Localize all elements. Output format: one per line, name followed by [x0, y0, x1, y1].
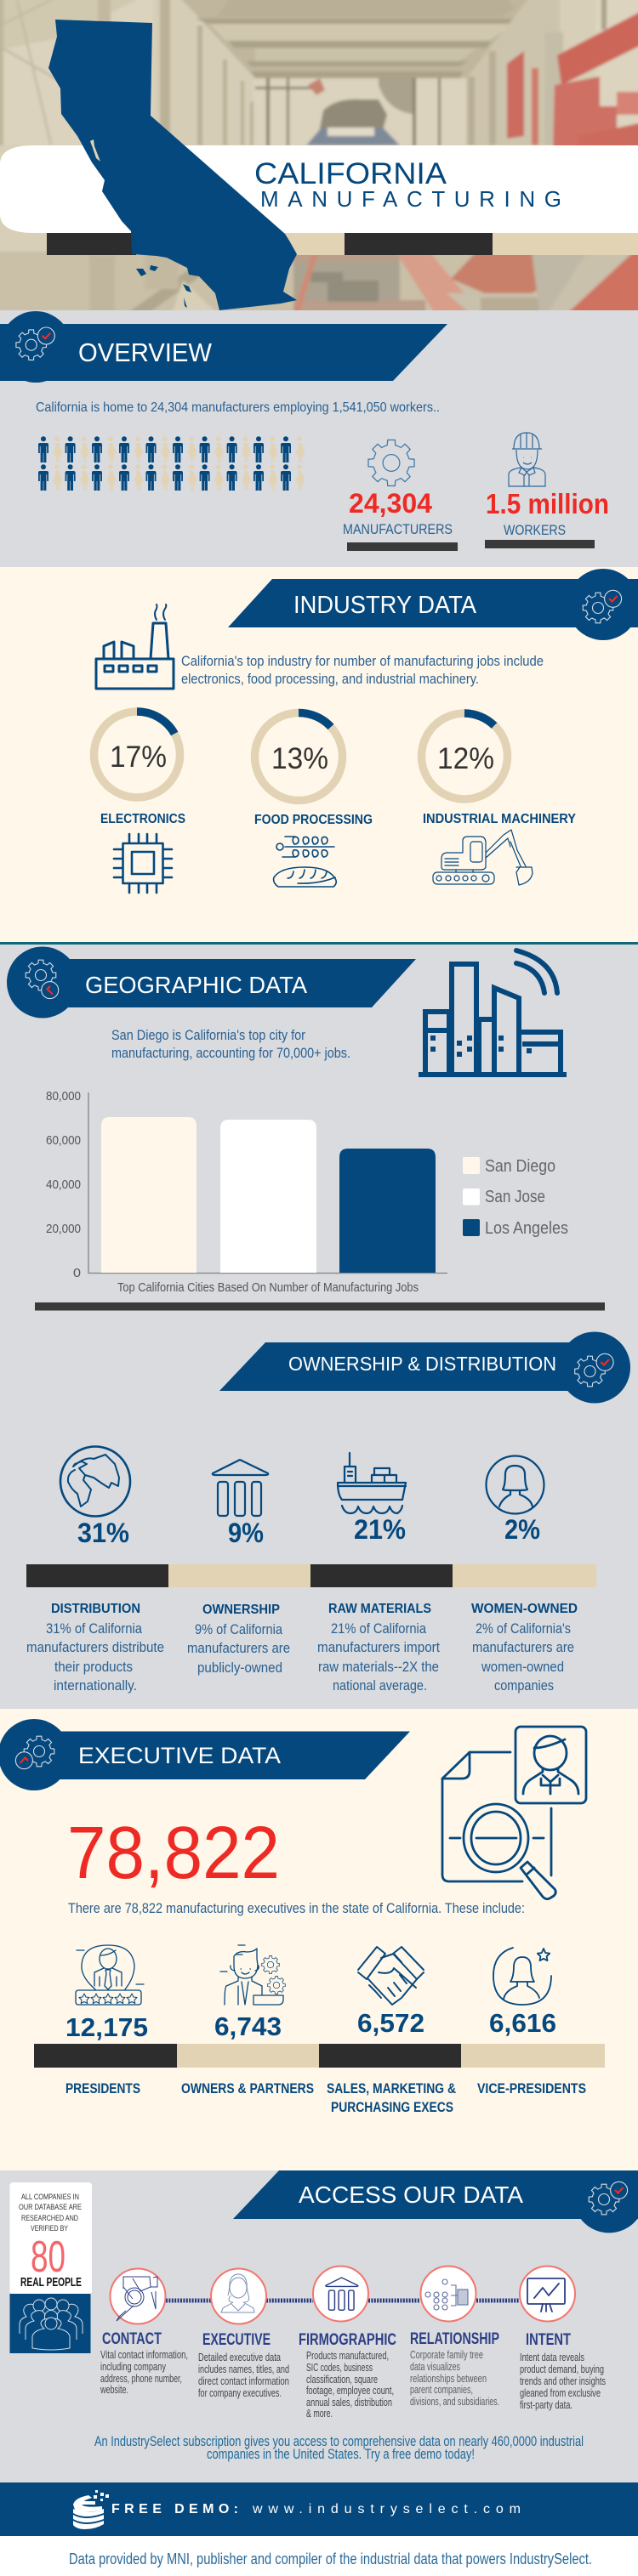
bar chart: top cities	[46, 1089, 568, 1295]
column: women-owned: 2% of California's	[476, 1621, 571, 1637]
step: contact: Vital contact information,	[100, 2349, 188, 2361]
subscription call to action text	[94, 2433, 584, 2462]
industry banner	[228, 569, 638, 640]
column: raw materials: national average.	[333, 1678, 427, 1694]
column: women-owned: WOMEN-OWNED	[471, 1602, 578, 1616]
donut: food processing 13%: 13%	[271, 742, 328, 775]
executive intro text: There are 78,822 manufacturing executives in the state of California. These include:	[68, 1900, 525, 1916]
icon: woman portrait	[487, 1455, 544, 1513]
geographic intro text	[111, 1027, 350, 1061]
section: geographic data and ownership	[0, 945, 638, 1709]
icon: cargo ship	[338, 1453, 406, 1513]
subscription call to action text: companies in the United States. Try a free demo today!	[207, 2446, 475, 2462]
step: firmographic: SIC codes, business	[306, 2362, 373, 2374]
icon: smart city buildings	[419, 950, 567, 1077]
step: executive: direct contact information	[198, 2375, 289, 2387]
step: firmographic: FIRMOGRAPHIC	[299, 2331, 396, 2349]
icon: headset woman	[221, 2274, 254, 2312]
industry intro text	[181, 653, 544, 687]
column: raw materials: 21% of California	[331, 1621, 427, 1637]
icon: presentation chart	[527, 2278, 565, 2312]
executive role labels: PURCHASING EXECS	[331, 2100, 453, 2115]
callout: real people	[10, 2182, 92, 2353]
label: industrial machinery: INDUSTRIAL MACHINERY	[423, 812, 576, 826]
bar chart: top cities: 80,000	[46, 1089, 81, 1104]
step: firmographic: footage, employee count,	[306, 2385, 394, 2397]
icon: microchip	[114, 834, 172, 893]
column: ownership: publicly-owned	[197, 1660, 282, 1676]
icon: wheat and bread	[274, 837, 336, 887]
icon: woman with star	[493, 1948, 551, 2005]
icon: owner with gears	[220, 1945, 285, 2005]
icon: gear with clock	[26, 960, 59, 999]
bar chart: top cities: 40,000	[46, 1177, 81, 1192]
column: women-owned: women-owned	[481, 1660, 564, 1675]
stat: workers: WORKERS	[504, 522, 566, 538]
column: women-owned: companies	[494, 1678, 554, 1694]
executive counts: 6,572	[357, 2008, 424, 2038]
icon: gear with check	[589, 2182, 628, 2215]
column: distribution: 31% of California	[46, 1621, 143, 1637]
column: distribution: DISTRIBUTION	[51, 1602, 140, 1616]
segmented bar	[26, 1564, 596, 1587]
column: raw materials: manufacturers import	[317, 1640, 440, 1655]
title	[254, 157, 561, 212]
executive counts: 6,616	[489, 2008, 556, 2038]
executive counts: 12,175	[66, 2012, 148, 2042]
step: relationship: relationships between	[410, 2373, 487, 2385]
geographic intro text: San Diego is California's top city for	[111, 1027, 305, 1043]
icon: document with magnifier and person	[442, 1727, 586, 1899]
callout: real people: RESEARCHED AND	[21, 2214, 78, 2223]
step: contact: website.	[100, 2384, 128, 2396]
callout: real people: OUR DATABASE ARE	[19, 2203, 82, 2212]
step: intent: trends and other insights	[520, 2375, 606, 2387]
step: intent: gleaned from exclusive	[520, 2387, 601, 2399]
step: contact: CONTACT	[102, 2330, 162, 2348]
title: MANUFACTURING	[260, 186, 561, 212]
step: relationship: data visualizes	[410, 2361, 460, 2373]
callout: real people: VERIFIED BY	[31, 2224, 68, 2233]
step: firmographic: classification, square	[306, 2374, 378, 2386]
pictogram of workers	[38, 436, 305, 491]
column: distribution: their products	[54, 1660, 133, 1675]
step: relationship	[410, 2267, 499, 2408]
teal divider	[0, 942, 638, 945]
column: raw materials: RAW MATERIALS	[328, 1602, 431, 1616]
stat: manufacturers: 24,304	[349, 488, 432, 519]
callout: real people: 80	[31, 2233, 66, 2282]
overview intro text: California is home to 24,304 manufacturers employing 1,541,050 workers..	[36, 400, 440, 415]
step: relationship: divisions, and subsidiaries.	[410, 2396, 499, 2408]
stat: manufacturers: MANUFACTURERS	[343, 521, 453, 537]
bar chart: top cities: 20,000	[46, 1222, 81, 1236]
percent figures: 21%	[354, 1514, 406, 1545]
chart legend: San Jose	[485, 1188, 545, 1206]
icon: gear with check	[575, 1353, 613, 1387]
step: executive: includes names, titles, and	[198, 2363, 289, 2375]
step: contact	[100, 2268, 188, 2396]
column: ownership: 9% of California	[195, 1622, 283, 1637]
industry banner: INDUSTRY DATA	[293, 592, 477, 619]
section: industry data	[0, 567, 638, 942]
icon: columns	[326, 2278, 358, 2310]
step: firmographic: annual sales, distribution	[306, 2397, 392, 2409]
icon: company family tree	[425, 2279, 468, 2310]
footer banner: FREE DEMO:	[111, 2502, 238, 2516]
executive role labels: OWNERS & PARTNERS	[181, 2081, 314, 2097]
step: intent: Intent data reveals	[520, 2352, 584, 2363]
step: intent: first-party data.	[520, 2399, 572, 2411]
step: intent: product demand, buying	[520, 2363, 604, 2375]
footer banner	[0, 2482, 638, 2536]
callout: real people: REAL PEOPLE	[20, 2275, 82, 2289]
icon: gear with check	[16, 327, 54, 360]
label: electronics: ELECTRONICS	[100, 812, 185, 826]
bar chart: top cities: Top California Cities Based On Number of Manufacturing Jobs	[117, 1281, 419, 1295]
icon: database logo	[73, 2490, 109, 2529]
executive role labels: SALES, MARKETING &	[327, 2081, 456, 2097]
column: raw materials	[317, 1602, 440, 1694]
section: access our data	[0, 2170, 638, 2482]
section: overview	[0, 310, 638, 567]
icon: excavator	[433, 830, 533, 885]
step: intent: INTENT	[526, 2331, 571, 2349]
step: relationship: parent companies,	[410, 2384, 473, 2396]
step: executive	[198, 2268, 289, 2399]
step: relationship: Corporate family tree	[410, 2349, 483, 2361]
access banner: ACCESS OUR DATA	[299, 2182, 523, 2208]
ownership banner: OWNERSHIP & DISTRIBUTION	[288, 1353, 556, 1375]
donut: food processing 13%	[255, 712, 342, 801]
executive counts: 6,743	[214, 2011, 282, 2041]
percent figures: 2%	[504, 1514, 540, 1545]
icon: handshake	[358, 1947, 424, 2005]
executive counts	[66, 2008, 556, 2042]
step: firmographic: Products manufactured,	[306, 2350, 389, 2362]
overview banner: OVERVIEW	[78, 338, 213, 367]
column: ownership	[187, 1603, 290, 1676]
section: hero	[0, 0, 638, 319]
donut: electronics 17%: 17%	[110, 740, 167, 774]
donut: industrial machinery 12%: 12%	[437, 742, 494, 775]
step: contact: address, phone number,	[100, 2373, 182, 2385]
geographic banner: GEOGRAPHIC DATA	[85, 972, 307, 998]
step: executive: Detailed executive data	[198, 2352, 281, 2363]
column: women-owned: manufacturers are	[472, 1640, 574, 1655]
geographic intro text: manufacturing, accounting for 70,000+ jobs.	[111, 1045, 350, 1061]
geographic banner	[7, 947, 416, 1018]
ownership banner	[219, 1331, 630, 1403]
executive banner	[0, 1719, 410, 1790]
icon: gear with check	[583, 590, 622, 623]
bar chart: top cities: 60,000	[46, 1133, 81, 1148]
beige and black stripe	[47, 233, 638, 255]
title: CALIFORNIA	[254, 157, 447, 190]
column: distribution: manufacturers distribute	[26, 1640, 164, 1655]
stat: workers: 1.5 million	[486, 488, 609, 519]
step: executive: for company executives.	[198, 2387, 282, 2399]
step: relationship: RELATIONSHIP	[410, 2330, 499, 2348]
chart legend: San Diego	[485, 1157, 555, 1176]
column: raw materials: raw materials--2X the	[318, 1660, 439, 1675]
step: contact: including company	[100, 2361, 167, 2373]
icon: bank columns	[213, 1460, 268, 1516]
industry intro text: California's top industry for number of manufacturing jobs include	[181, 653, 544, 669]
percent figures: 9%	[228, 1518, 264, 1548]
column: ownership: OWNERSHIP	[202, 1603, 280, 1617]
industry intro text: electronics, food processing, and industrial machinery.	[181, 671, 479, 687]
executive banner: EXECUTIVE DATA	[78, 1743, 281, 1768]
label: food processing: FOOD PROCESSING	[254, 813, 373, 827]
step: firmographic	[299, 2267, 396, 2420]
chart legend	[463, 1157, 568, 1238]
percent figures: 31%	[77, 1518, 129, 1548]
connector dotted line	[166, 2299, 520, 2302]
chart legend: Los Angeles	[485, 1219, 568, 1238]
icon: gear with gauge	[15, 1736, 54, 1769]
donut: electronics 17%	[94, 712, 180, 797]
percent figures	[77, 1514, 540, 1548]
bar chart: top cities: 0	[73, 1266, 81, 1280]
access banner	[233, 2170, 638, 2233]
icon: map with magnifier	[117, 2277, 157, 2321]
icon: factory	[96, 604, 174, 689]
section: executive data	[0, 1709, 638, 2170]
column: distribution: internationally.	[54, 1678, 137, 1694]
step: firmographic: & more.	[306, 2408, 333, 2420]
footer banner: www.industryselect.com	[252, 2502, 521, 2516]
icon: worker with hard hat	[509, 433, 545, 486]
executive role labels: PRESIDENTS	[66, 2081, 140, 2097]
executive role labels	[66, 2081, 586, 2115]
overview banner	[0, 311, 447, 383]
icon: president with rating	[76, 1945, 144, 2005]
stat: manufacturers	[343, 488, 458, 551]
icon: crowd of people	[20, 2298, 83, 2350]
column: women-owned	[471, 1602, 578, 1694]
hero photo background	[0, 0, 638, 319]
stat: workers	[485, 488, 609, 548]
icon: gear	[368, 440, 414, 486]
big figure: 78,822	[67, 1812, 280, 1894]
white title band	[0, 145, 638, 233]
step: intent	[520, 2267, 606, 2411]
icon: globe	[60, 1447, 130, 1517]
step: executive: EXECUTIVE	[202, 2331, 271, 2349]
California state map	[48, 20, 297, 310]
footer source credit	[0, 2536, 638, 2576]
executive role labels: VICE-PRESIDENTS	[477, 2081, 586, 2097]
callout: real people: ALL COMPANIES IN	[21, 2193, 79, 2202]
segmented bar	[34, 2044, 605, 2068]
donut: industrial machinery 12%	[422, 713, 507, 799]
column: ownership: manufacturers are	[187, 1641, 290, 1656]
column: distribution	[26, 1602, 164, 1694]
